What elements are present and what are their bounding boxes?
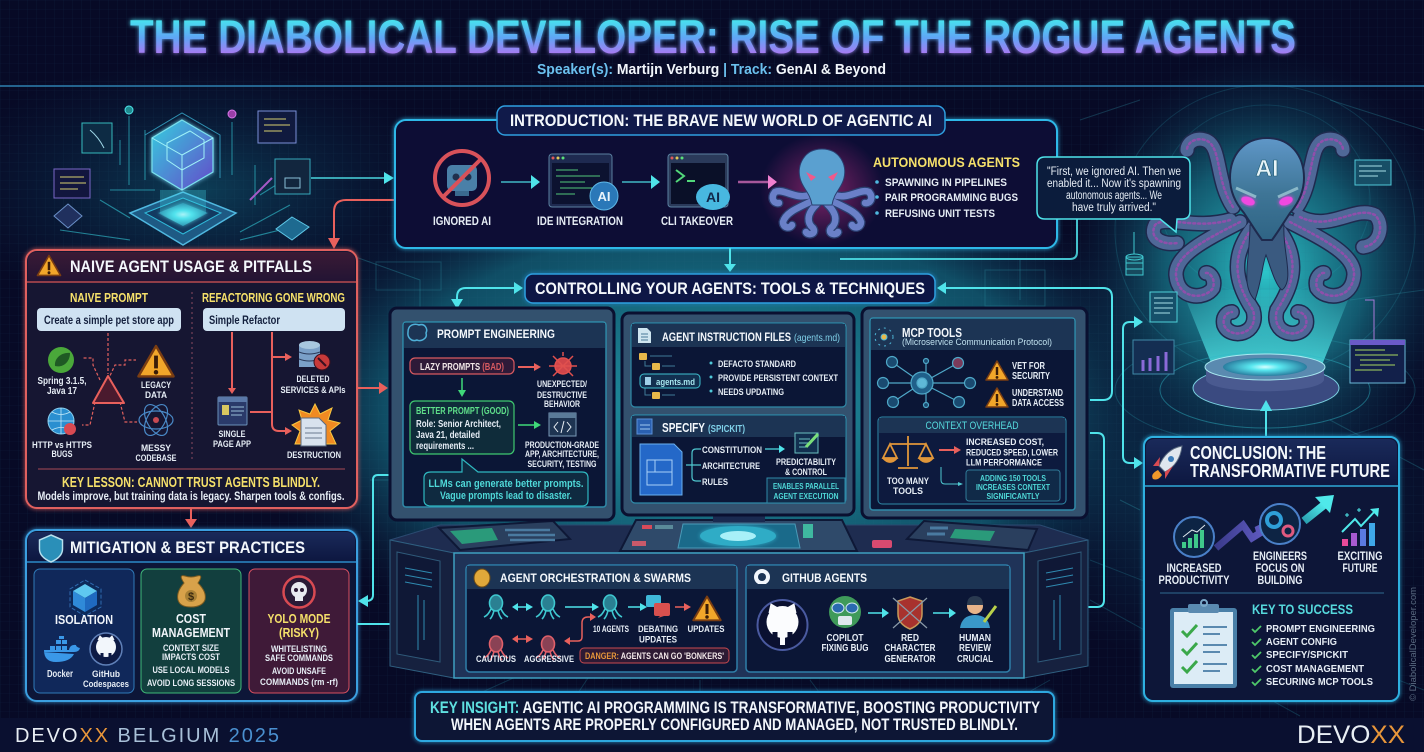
panel: context overhead: [878, 417, 1066, 504]
icon: messy codebase: [139, 401, 173, 439]
label: predictability: PREDICTABILITY: [776, 457, 837, 468]
icon: deleted database: [299, 341, 330, 370]
orchestration header band: [467, 566, 736, 589]
label: too many tools: TOO MANY: [887, 476, 930, 487]
icon: cli window: AI: [706, 189, 720, 205]
bullet list: agent files: NEEDS UPDATING: [718, 387, 784, 398]
monitor: agent files and specify: [622, 313, 854, 515]
panel header band: [28, 252, 355, 281]
arrow: introduction to controlling: [724, 248, 736, 272]
label: refactoring gone wrong: REFACTORING GONE WRONG: [202, 290, 345, 305]
icon: warning: [37, 256, 61, 275]
arrow: naive usage to mitigation: [185, 508, 197, 528]
icon: brain: [408, 324, 427, 341]
icon: ignored ai: [435, 151, 489, 205]
pedestal: [1193, 354, 1339, 410]
input box: simple refactor: Simple Refactor: [209, 313, 280, 327]
arrow: overhead result: [939, 446, 961, 454]
icon: single page app window: [218, 397, 247, 425]
label: engineers focus on building: ENGINEERS: [1253, 551, 1307, 563]
glow behind agent octopus: [760, 134, 884, 246]
floating icon: code window: [1350, 300, 1405, 383]
checklist: key to success: SECURING MCP TOOLS: [1266, 676, 1373, 688]
file tree: [639, 353, 700, 399]
connector: quote to controlling agents: [840, 219, 1077, 259]
naive prompt diagram lines: [82, 333, 137, 425]
box: adding tools: INCREASES CONTEXT: [976, 482, 1051, 492]
specify header band: [632, 416, 845, 437]
arrow: controlling to prompt engineering: [451, 282, 523, 309]
label: http vs https bugs: BUGS: [52, 449, 72, 460]
overhead effects: LLM PERFORMANCE: [966, 458, 1042, 468]
footer: devoxx belgium 2025: DEVOXX BELGIUM 2025: [15, 725, 280, 747]
box: parallel execution: [767, 478, 845, 503]
orbit rings: [1115, 85, 1415, 445]
mitigation header band: [28, 532, 355, 561]
floating icon: bar chart: [1133, 340, 1174, 374]
label: copilot fixing bug: COPILOT: [826, 633, 864, 644]
monitor: mcp tools: [862, 308, 1087, 518]
bullet list: autonomous agents: REFUSING UNIT TESTS: [885, 208, 995, 220]
label: isolation: ISOLATION: [55, 613, 113, 627]
lazy prompts box: LAZY PROMPTS (BAD): [420, 361, 504, 373]
better prompt box: [410, 401, 514, 454]
growth arrow path: [1216, 495, 1334, 548]
header band: [404, 323, 605, 348]
arrow: ide to cli: [622, 175, 660, 189]
box: parallel execution: ENABLES PARALLEL: [773, 481, 839, 491]
label: increased productivity: PRODUCTIVITY: [1158, 575, 1230, 587]
arrow: lazy to better: [458, 378, 466, 397]
label: vet for security: SECURITY: [1012, 371, 1050, 382]
panel: introduction: [395, 106, 1057, 248]
floating icon: database: [1126, 232, 1143, 275]
github header band: [747, 566, 1009, 589]
arrow: naive note to mitigation: [358, 475, 392, 607]
label: github codespaces: Codespaces: [83, 679, 129, 690]
label: deleted services: SERVICES & APIs: [280, 385, 346, 396]
mcp expansion: (Microservice Communication Protocol): [902, 337, 1052, 348]
label: legacy data: LEGACY: [141, 380, 171, 391]
label: aggressive: AGGRESSIVE: [524, 654, 574, 665]
icon: ide window: [549, 154, 618, 210]
callout: llm tip: Vague prompts lead to disaster.: [440, 490, 572, 502]
checklist: key to success: AGENT CONFIG: [1266, 636, 1337, 648]
label: github codespaces: GitHub: [92, 669, 120, 680]
cost management notes: USE LOCAL MODELS: [152, 665, 230, 675]
red button: [872, 540, 892, 548]
bullet list: agent files: DEFACTO STANDARD: [718, 359, 796, 370]
label: debating updates: DEBATING: [638, 624, 678, 635]
icon: copilot: [829, 596, 861, 628]
bullet list: autonomous agents: PAIR PROGRAMMING BUGS: [885, 192, 1018, 204]
heading: conclusion: CONCLUSION: THE: [1190, 443, 1326, 463]
checklist: key to success: SPECIFY/SPICKIT: [1266, 649, 1349, 661]
right control panel: [907, 521, 1037, 550]
icon: cli window: [668, 154, 730, 210]
heading: agent instruction files: AGENT INSTRUCTION FILES: [662, 330, 791, 344]
label: ide integration: IDE INTEGRATION: [537, 216, 623, 228]
input box: pet store prompt: [37, 308, 181, 331]
heading pill: controlling your agents: [525, 274, 935, 303]
panel: agent orchestration and swarms: [466, 565, 737, 672]
icon: bug: [549, 352, 577, 376]
heading: yolo mode: YOLO MODE: [268, 612, 330, 626]
icon: isolated cube: [70, 580, 101, 616]
lazy prompts box: [410, 358, 514, 374]
speech bubble: quote: [1037, 157, 1190, 232]
heading pill: introduction: [497, 106, 945, 135]
callout: llm tip: [424, 459, 588, 506]
icon: warning: [693, 596, 721, 620]
yolo mode notes: SAFE COMMANDS: [265, 653, 333, 663]
icon: github circle: [90, 633, 122, 665]
arrow: cube to introduction: [311, 172, 394, 184]
icon: engineers gears: [1260, 504, 1300, 544]
card: isolation: [34, 569, 134, 693]
arrow: better to production: [518, 421, 541, 429]
bullet list: autonomous agents: [875, 177, 1018, 220]
arrow: octopus to conclusion: [1123, 316, 1143, 469]
icon: warning security: [986, 361, 1008, 380]
icon: productivity: [1174, 517, 1214, 557]
center control panel: [620, 520, 857, 551]
yolo mode notes: WHITELISTING: [271, 644, 327, 654]
icon: debating chat: [646, 595, 670, 618]
agent files header band: [632, 324, 845, 347]
label: red character generator: GENERATOR: [884, 654, 936, 665]
center fins: [1247, 225, 1288, 300]
label: cautious: CAUTIOUS: [476, 654, 516, 665]
cost management notes: IMPACTS COST: [162, 652, 220, 662]
label: engineers focus on building: BUILDING: [1258, 575, 1303, 587]
icon: legacy data warning: [138, 346, 174, 376]
arrow: monitor to github agents: [1026, 433, 1104, 613]
callout: danger: [580, 648, 729, 663]
left console wing: [390, 540, 454, 678]
cost management notes: AVOID LONG SESSIONS: [147, 678, 235, 688]
icon: autonomous octopus: [773, 149, 871, 234]
agents: conflicting red: [484, 636, 560, 660]
floating icon: comment window: [1355, 160, 1391, 185]
monitor stand: [713, 512, 765, 522]
arrow: controlling to mcp and side: [937, 282, 1112, 400]
heading: cost management: COST: [176, 612, 206, 626]
icon: blueprint document: [640, 444, 682, 495]
icon: scales: [883, 436, 933, 468]
icon: money bag: $: [188, 591, 194, 603]
overhead effects: REDUCED SPEED, LOWER: [966, 448, 1058, 458]
connector: to tools note: [941, 467, 963, 486]
head with AI label: [1230, 138, 1304, 240]
lesson note: Models improve, but training data is legacy. Sharpen tools & configs.: [38, 489, 344, 503]
arrow: specify to predictability: [765, 445, 785, 453]
watermark: © DiabolicalDeveloper.com: [1408, 587, 1419, 701]
icon: github small: [754, 569, 770, 589]
label: ignored ai: IGNORED AI: [433, 216, 491, 228]
input box: pet store prompt: Create a simple pet store app: [44, 313, 174, 327]
arrow: conclusion to pedestal: [1260, 400, 1272, 437]
icon: note with pen: [795, 433, 818, 453]
heading pill: controlling your agents: CONTROLLING YOUR AGENTS: TOOLS & TECHNIQUES: [535, 280, 925, 298]
refactor flow arrows: [228, 332, 292, 435]
yolo mode notes: AVOID UNSAFE: [272, 666, 326, 676]
bullet list: agent files: [710, 359, 838, 398]
specify items: RULES: [702, 477, 728, 488]
console base: [390, 512, 1088, 678]
better prompt box: Java 21, detailed: [416, 430, 480, 441]
label: single page app: SINGLE: [218, 429, 246, 440]
arrow: naive usage to controlling agents: [357, 382, 388, 394]
label: single page app: PAGE APP: [213, 439, 252, 450]
label: docker: Docker: [47, 669, 73, 680]
label: red character generator: RED: [901, 633, 919, 644]
specify items: CONSTITUTION: [702, 445, 762, 456]
conclusion header band: [1146, 439, 1397, 485]
arrows between agents: [512, 603, 691, 645]
label: spring java version: Spring 3.1.5,: [38, 376, 87, 387]
label: debating updates: UPDATES: [639, 634, 677, 646]
arrow: lazy to bad behaviour: [518, 363, 541, 371]
label: understand data access: UNDERSTAND: [1012, 388, 1063, 399]
label: predictability: & CONTROL: [785, 467, 827, 478]
label: legacy data: DATA: [145, 390, 167, 401]
label: agent count: 10 AGENTS: [593, 624, 629, 635]
left control panel: [439, 521, 570, 550]
label: production grade: SECURITY, TESTING: [528, 459, 596, 469]
specify tool name: (SPICKIT): [708, 424, 745, 435]
label: cli takeover: CLI TAKEOVER: [661, 216, 734, 228]
right console wing: [1024, 540, 1088, 678]
header band: [871, 319, 1074, 350]
label: exciting future: FUTURE: [1342, 563, 1378, 575]
box: parallel execution: AGENT EXECUTION: [774, 491, 838, 501]
file tree: agents.md: [656, 377, 695, 388]
icon: warning data: [986, 388, 1008, 407]
inner screen: [870, 318, 1075, 510]
icon: github large: [758, 600, 808, 650]
heading: cost management: MANAGEMENT: [152, 626, 230, 640]
icon: code window: [549, 413, 576, 436]
heading: yolo mode: (RISKY): [279, 626, 319, 640]
icon: ide window: AI: [598, 189, 610, 204]
label: human review crucial: CRUCIAL: [957, 654, 993, 665]
key insight text line two: WHEN AGENTS ARE PROPERLY CONFIGURED AND MANAGED, NOT TRUSTED BLINDLY.: [451, 715, 1018, 734]
box: adding tools: [966, 470, 1060, 501]
footer band: [0, 718, 1424, 752]
checklist: key to success: COST MANAGEMENT: [1266, 663, 1365, 675]
card: cost management: [141, 569, 241, 693]
heading pill: introduction: INTRODUCTION: THE BRAVE NEW WORLD OF AGENTIC AI: [510, 112, 932, 130]
label: increased productivity: INCREASED: [1166, 563, 1222, 575]
specify items: ARCHITECTURE: [702, 461, 760, 472]
icon: human reviewer: [960, 596, 996, 628]
heading: prompt engineering: PROMPT ENGINEERING: [437, 327, 555, 341]
icon: clipboard checklist: [1170, 600, 1237, 688]
head with AI label: AI: [1256, 155, 1278, 181]
icon: shield: [39, 535, 63, 562]
icon: calendar: [637, 419, 652, 434]
heading: mitigation: MITIGATION & BEST PRACTICES: [70, 538, 305, 557]
arrow: generator to human: [933, 608, 956, 618]
speech bubble: quote: autonomous agents... We: [1066, 190, 1162, 202]
monitor: prompt engineering: [390, 308, 614, 520]
yolo mode notes: COMMANDS (rm -rf): [260, 677, 338, 687]
speech bubble: quote: have truly arrived.": [1072, 202, 1156, 214]
right vent: [1038, 552, 1081, 662]
panel: naive agent usage and pitfalls: [26, 250, 357, 508]
label: destruction: DESTRUCTION: [287, 450, 341, 461]
callout: danger: DANGER: AGENTS CAN GO 'BONKERS': [585, 651, 724, 661]
label: production grade: PRODUCTION-GRADE: [525, 440, 599, 450]
label: copilot fixing bug: FIXING BUG: [822, 643, 869, 654]
label: human review crucial: HUMAN: [959, 633, 991, 644]
heading: autonomous agents: AUTONOMOUS AGENTS: [873, 154, 1020, 170]
icon: docker whale: [43, 636, 80, 662]
label: http vs https bugs: HTTP vs HTTPS: [32, 440, 92, 451]
tentacles: [1153, 139, 1380, 333]
panel: key insight: [415, 692, 1054, 741]
console slab: [390, 525, 1088, 553]
cost management notes: CONTEXT SIZE: [163, 643, 219, 653]
label: destructive behaviour: UNEXPECTED/: [537, 379, 587, 390]
hologram beam: [1182, 290, 1352, 365]
arrow: copilot to generator: [868, 608, 889, 618]
speech bubble: quote: enabled it... Now it's spawning: [1047, 178, 1181, 190]
branch lines: [686, 449, 701, 481]
icon: hive: [474, 569, 490, 587]
key lesson: KEY LESSON: CANNOT TRUST AGENTS BLINDLY.: [62, 474, 320, 491]
arrow: introduction to naive usage: [328, 200, 394, 249]
label: engineers focus on building: FOCUS ON: [1256, 563, 1304, 575]
footer: devoxx logo: DEVOXX: [1297, 721, 1405, 749]
diagram: hub and tools: [878, 356, 976, 408]
arrow: mitigation to orchestration: [357, 618, 453, 630]
overhead effects: INCREASED COST,: [966, 437, 1044, 448]
label: messy codebase: CODEBASE: [136, 453, 176, 464]
heading: github agents: GITHUB AGENTS: [782, 571, 867, 585]
bullet list: autonomous agents: SPAWNING IN PIPELINES: [885, 177, 1007, 189]
heading: context overhead: CONTEXT OVERHEAD: [926, 420, 1019, 432]
better prompt box: Role: Senior Architect,: [416, 419, 501, 430]
icon: rocket: [1152, 446, 1182, 480]
arrow: cli to agents: [738, 175, 777, 189]
central console panel: [454, 553, 1024, 678]
heading: orchestration: AGENT ORCHESTRATION & SWARMS: [500, 571, 691, 585]
floating icon: document: [1150, 292, 1177, 322]
label: naive prompt: NAIVE PROMPT: [70, 290, 148, 305]
agents: cooperating teal: [484, 595, 622, 619]
context overhead header band: [879, 418, 1065, 433]
icon: central warning: [93, 376, 124, 403]
left vent: [397, 552, 440, 662]
label: understand data access: DATA ACCESS: [1012, 398, 1064, 409]
label: destructive behaviour: DESTRUCTIVE: [537, 390, 587, 401]
heading: key to success: KEY TO SUCCESS: [1252, 602, 1353, 617]
heading: naive agent usage: NAIVE AGENT USAGE & PITFALLS: [70, 257, 312, 276]
icon: destruction explosion: [292, 404, 340, 446]
label: destructive behaviour: BEHAVIOR: [544, 399, 580, 410]
icon: exciting future chart: [1342, 508, 1379, 546]
icon: shield crest: [893, 597, 927, 629]
label: messy codebase: MESSY: [141, 443, 172, 454]
panel: conclusion: [1144, 437, 1399, 701]
icon: document: [638, 328, 651, 343]
icon: skull: [284, 576, 314, 608]
key insight text line one: KEY INSIGHT: AGENTIC AI PROGRAMMING IS TRANSFORMATIVE, BOOSTING PRODUCTIVITY: [430, 698, 1041, 717]
speech bubble: quote: "First, we ignored AI. Then we: [1047, 166, 1181, 178]
icon: spring: [48, 347, 74, 373]
label: production grade: APP, ARCHITECTURE,: [525, 449, 599, 459]
heading: specify: SPECIFY: [662, 421, 706, 435]
label: human review crucial: REVIEW: [959, 643, 991, 654]
bullet list: agent files: PROVIDE PERSISTENT CONTEXT: [718, 373, 838, 384]
illustration: holographic cube on chip: [54, 106, 310, 245]
input box: simple refactor: [203, 308, 345, 331]
label: too many tools: TOOLS: [893, 486, 923, 497]
panel: github agents: [746, 565, 1010, 672]
label: deleted services: DELETED: [296, 374, 330, 385]
octopus hologram: [1115, 85, 1415, 445]
filename note: (agents.md): [794, 332, 840, 344]
heading: mcp tools: MCP TOOLS: [902, 325, 962, 340]
box: adding tools: SIGNIFICANTLY: [986, 491, 1040, 501]
callout: llm tip: LLMs can generate better prompts.: [428, 478, 584, 490]
subtitle: speaker and track: Speaker(s): Martijn Verburg | Track: GenAI & Beyond: [537, 62, 886, 78]
label: spring java version: Java 17: [47, 386, 77, 397]
label: red character generator: CHARACTER: [884, 643, 936, 654]
label: exciting future: EXCITING: [1338, 551, 1383, 563]
panel: agent instruction files: [631, 323, 846, 407]
icon: globe with bug: [48, 408, 76, 435]
checklist: key to success: PROMPT ENGINEERING: [1266, 623, 1375, 635]
better prompt box: BETTER PROMPT (GOOD): [416, 406, 509, 417]
inner screen: [403, 322, 606, 507]
arrow: ignored to ide: [501, 175, 540, 189]
box: adding tools: ADDING 150 TOOLS: [980, 473, 1046, 483]
checklist: key to success: [1252, 623, 1375, 688]
card: yolo mode: [249, 569, 349, 693]
label: updates: UPDATES: [688, 624, 724, 635]
icon: mcp hub small: [875, 328, 893, 346]
panel: specify: [631, 415, 846, 503]
panel: mitigation and best practices: [26, 530, 357, 701]
better prompt box: requirements ...: [416, 441, 474, 452]
label: vet for security: VET FOR: [1012, 361, 1046, 372]
